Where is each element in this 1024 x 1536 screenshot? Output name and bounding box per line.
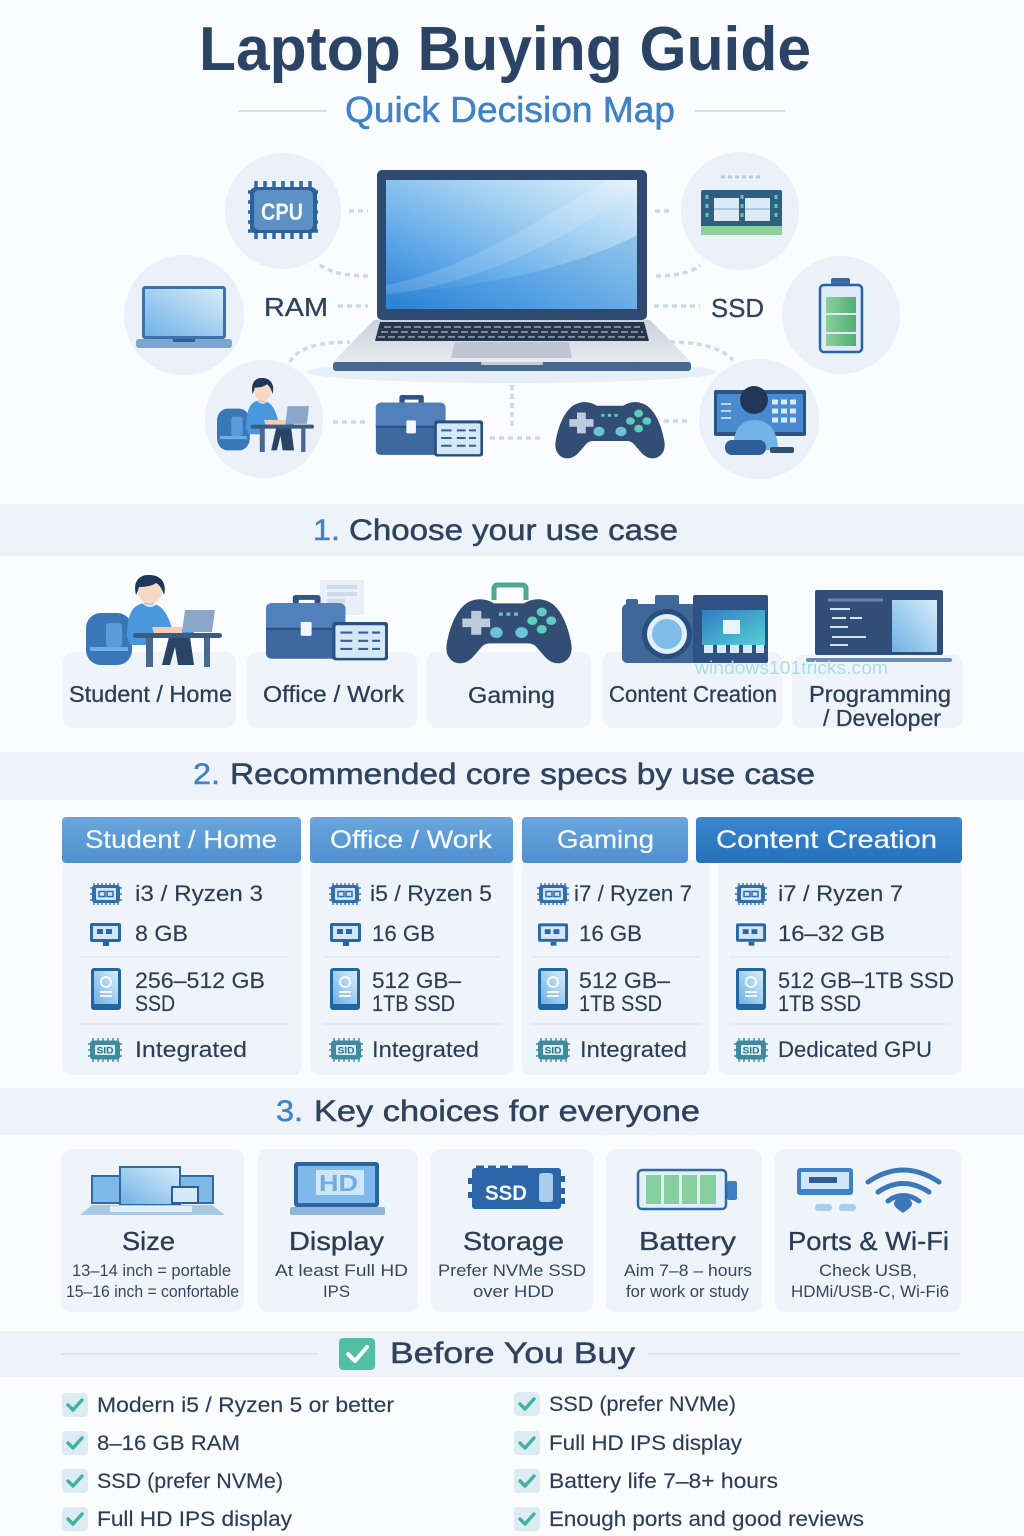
card: size [61,1149,244,1312]
panel: key choices [61,1149,961,1312]
card: battery: Aim 7–8 – hours [624,1261,752,1280]
column: content creation: 512 GB–1TB SSD [778,968,954,993]
icon circle: CPU: CPU [261,199,303,226]
column: content creation: i7 / Ryzen 7 [778,881,903,906]
card: ports and wi-fi: Check USB, [819,1261,917,1280]
heading: before you buy [61,1337,960,1370]
heading: recommended core specs: Recommended core specs by use case [230,758,815,791]
column: gaming: Integrated [580,1037,687,1062]
card: display [258,1149,418,1312]
column: office / work: 16 GB [372,921,435,946]
connector dots [290,211,733,438]
card: programming / developer: / Developer [823,705,941,731]
card: storage: Prefer NVMe SSD [438,1261,586,1280]
card: content creation: Content Creation [609,681,777,707]
checklist: left: Full HD IPS display [97,1508,293,1531]
card: size: 15–16 inch = confortable [66,1282,239,1301]
card: student / home: Student / Home [69,681,232,707]
column: content creation [696,817,962,1075]
icon circle: battery [782,256,900,374]
icon circle: RAM module [681,152,799,270]
card: battery [606,1149,762,1312]
title: Laptop Buying Guide [199,15,811,84]
heading: key choices: Key choices for everyone [314,1095,700,1128]
watermark: windows101tricks.com [694,658,888,678]
checklist: right: Full HD IPS display [549,1432,743,1455]
card: storage: SSD [485,1182,527,1205]
checklist: right: Battery life 7–8+ hours [549,1470,778,1493]
heading: recommended core specs: 2. [193,758,220,791]
icon circle: laptop [124,255,244,375]
column: gaming: 512 GB– [579,968,671,993]
card: storage [431,1149,593,1312]
card: office / work: Office / Work [263,681,405,707]
card: battery: for work or study [626,1282,749,1301]
band: section 3 [0,1088,1024,1135]
checklist: left: 8–16 GB RAM [97,1432,240,1455]
icon: gamepad small [555,402,665,458]
card: size: Size [122,1226,175,1256]
column: gaming [522,817,709,1075]
column: student / home: Student / Home [85,826,277,854]
heading: key choices: 3. [276,1095,303,1128]
column: office / work: i5 / Ryzen 5 [370,881,492,906]
checklist: right: Enough ports and good reviews [549,1508,864,1531]
card: content creation [603,595,782,728]
checklist: right: SSD (prefer NVMe) [549,1393,736,1416]
heading: before you buy: Before You Buy [390,1337,635,1370]
band: before you buy [0,1331,1024,1377]
icon circle: developer [699,359,819,479]
column: gaming: i7 / Ryzen 7 [574,881,692,906]
card: ports and wi-fi [775,1149,961,1312]
panel: use cases [63,575,963,731]
card: student / home [63,575,236,728]
card: programming / developer: Programming [809,681,951,707]
card: storage: Storage [463,1226,564,1256]
column: office / work: Office / Work [330,826,493,854]
card: display: IPS [323,1282,350,1301]
icon circle: student [205,360,323,478]
card: ports and wi-fi: HDMi/USB-C, Wi-Fi6 [791,1282,949,1301]
label: SSD: SSD [711,293,764,323]
column: student / home: SSD [135,991,175,1016]
band: section 2 [0,752,1024,800]
hero illustration [124,152,900,479]
checklist: right [514,1392,864,1531]
column: content creation: Content Creation [716,826,937,854]
column: office / work: 1TB SSD [372,991,455,1016]
card: programming / developer [792,590,963,731]
column: student / home: i3 / Ryzen 3 [135,881,263,906]
column: student / home: 8 GB [135,921,188,946]
column: office / work: 512 GB– [372,968,462,993]
label: RAM: RAM [264,292,328,322]
band: section 1 [0,504,1024,556]
subtitle: Quick Decision Map [345,89,675,130]
column: student / home: 256–512 GB [135,968,265,993]
card: office / work [247,580,417,728]
column: gaming: 16 GB [579,921,642,946]
icon: briefcase small [376,395,483,456]
column: office / work: Integrated [372,1037,479,1062]
card: gaming [427,585,591,728]
column: content creation: Dedicated GPU [778,1037,932,1062]
checklist: left: SSD (prefer NVMe) [97,1470,283,1493]
column: student / home [62,817,301,1075]
icon circle: CPU [225,153,341,269]
card: size: 13–14 inch = portable [72,1261,231,1280]
checklist: left [62,1393,394,1531]
column: office / work [310,817,513,1075]
column: gaming: 1TB SSD [579,991,662,1016]
card: ports and wi-fi: Ports & Wi-Fi [788,1226,949,1256]
card: battery: Battery [639,1226,736,1256]
card: display: At least Full HD [275,1261,408,1280]
column: gaming: Gaming [557,826,654,854]
checklist: left: Modern i5 / Ryzen 5 or better [97,1394,394,1417]
card: gaming: Gaming [468,682,555,708]
heading: choose your use case: 1. [313,514,340,547]
column: student / home: Integrated [135,1037,247,1062]
card: storage: over HDD [473,1282,554,1301]
central laptop [307,170,717,383]
heading: choose your use case: Choose your use case [349,514,678,547]
card: display: HD [319,1170,358,1196]
spec table [62,817,962,1075]
card: display: Display [289,1226,384,1256]
column: content creation: 1TB SSD [778,991,861,1016]
column: content creation: 16–32 GB [778,921,885,946]
